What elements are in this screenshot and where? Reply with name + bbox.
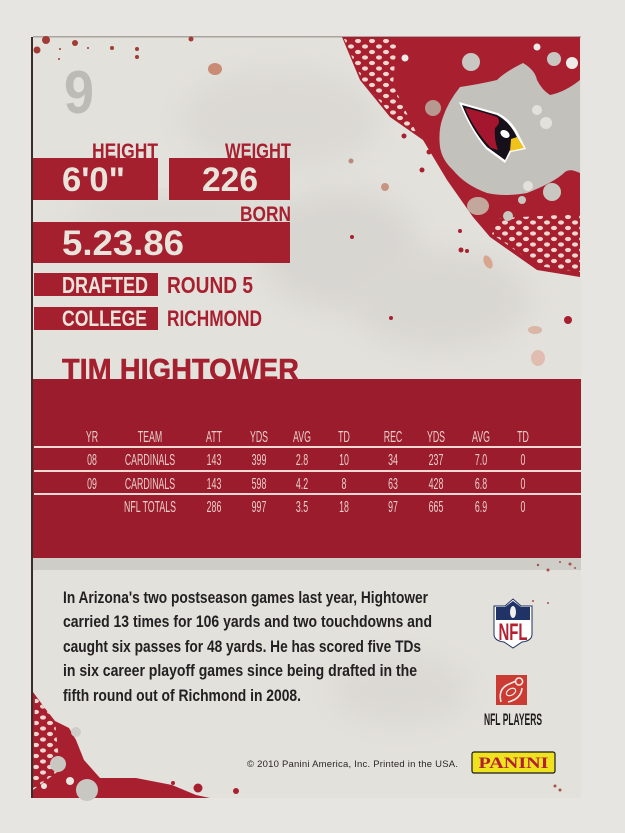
bio paragraph: carried 13 times for 106 yards and two touchdowns and <box>63 613 432 631</box>
stats table text: 7.0 <box>475 450 487 469</box>
stat: college <box>34 306 262 331</box>
stats table text: 997 <box>252 497 266 516</box>
top-right red splatter with logo field <box>208 37 581 366</box>
stats table text: 18 <box>339 497 349 516</box>
stats table text: CARDINALS <box>125 474 175 493</box>
stats table text: 6.8 <box>475 474 487 493</box>
stat: born: BORN <box>240 203 291 226</box>
stats table text: CARDINALS <box>125 450 175 469</box>
bio paragraph: fifth round out of Richmond in 2008. <box>63 687 301 705</box>
stats table text: 0 <box>521 450 525 469</box>
icon: NFL shield <box>494 599 532 648</box>
stat: drafted: ROUND 5 <box>167 272 253 298</box>
stat: college: COLLEGE <box>62 306 147 331</box>
stat: weight: WEIGHT <box>225 140 291 163</box>
stats table text: 8 <box>342 474 346 493</box>
stat: born <box>33 203 291 263</box>
splatter drops <box>350 134 572 324</box>
stats table text: 598 <box>252 474 266 493</box>
stat: drafted <box>34 272 253 298</box>
stats table text: 97 <box>388 497 398 516</box>
stats table text: AVG <box>472 427 490 446</box>
Panini logo <box>472 752 555 773</box>
stats table text: 143 <box>207 474 221 493</box>
stat: born: 5.23.86 <box>62 224 184 263</box>
Panini logo: PANINI <box>478 755 548 772</box>
stat: weight <box>169 140 291 200</box>
stats table text: YDS <box>250 427 268 446</box>
stats table text: 286 <box>207 497 221 516</box>
stats table text: NFL TOTALS <box>124 497 176 516</box>
bio paragraph: In Arizona's two postseason games last year, Hightower <box>63 589 428 607</box>
stats table text: TD <box>517 427 529 446</box>
stats table text: 665 <box>429 497 443 516</box>
stats table text: TD <box>338 427 350 446</box>
stat: height <box>33 140 158 200</box>
stats table text: 0 <box>521 497 525 516</box>
stats table text: AVG <box>293 427 311 446</box>
text: NFL PLAYERS <box>484 710 542 729</box>
panel: career stats <box>33 379 581 558</box>
stats table text: 63 <box>388 474 398 493</box>
stats table text <box>86 427 529 516</box>
stats table text: 143 <box>207 450 221 469</box>
copyright line: © 2010 Panini America, Inc. Printed in the USA. <box>247 759 458 770</box>
stats table text: 6.9 <box>475 497 487 516</box>
stat: height: HEIGHT <box>92 140 158 163</box>
stat: college: RICHMOND <box>167 306 262 331</box>
stats table text: YR <box>86 427 98 446</box>
stats table text: 237 <box>429 450 443 469</box>
top-left splatter <box>34 36 194 60</box>
stat: weight: 226 <box>202 161 258 199</box>
stats table text: 08 <box>87 450 97 469</box>
stats table text: REC <box>384 427 402 446</box>
stats table text: 10 <box>339 450 349 469</box>
bio paragraph <box>63 589 432 705</box>
stats table text: TEAM <box>138 427 162 446</box>
jersey number: 9 <box>64 59 94 126</box>
stats table lines <box>34 446 581 495</box>
stat: height: 6'0" <box>62 161 125 199</box>
bio paragraph: caught six passes for 48 yards. He has scored five TDs <box>63 638 421 656</box>
bio paragraph: in six career playoff games since being drafted in the <box>63 662 417 680</box>
small ink specks <box>532 561 576 792</box>
stats table text: YDS <box>427 427 445 446</box>
icon: cardinals logo <box>459 102 526 163</box>
stats table text: 34 <box>388 450 398 469</box>
icon: NFL shield: NFL <box>498 619 528 646</box>
stats table text: ATT <box>206 427 222 446</box>
stats table text: 3.5 <box>296 497 308 516</box>
stats table text: 2.8 <box>296 450 308 469</box>
player name: TIM HIGHTOWER <box>62 352 299 387</box>
bottom-left splatter <box>33 692 239 801</box>
icon: NFL Players <box>484 675 542 729</box>
stat: drafted: DRAFTED <box>62 272 148 298</box>
stats table text: 0 <box>521 474 525 493</box>
stats table text: 428 <box>429 474 443 493</box>
stats table text: 09 <box>87 474 97 493</box>
stats table text: 4.2 <box>296 474 308 493</box>
stats table text: 399 <box>252 450 266 469</box>
